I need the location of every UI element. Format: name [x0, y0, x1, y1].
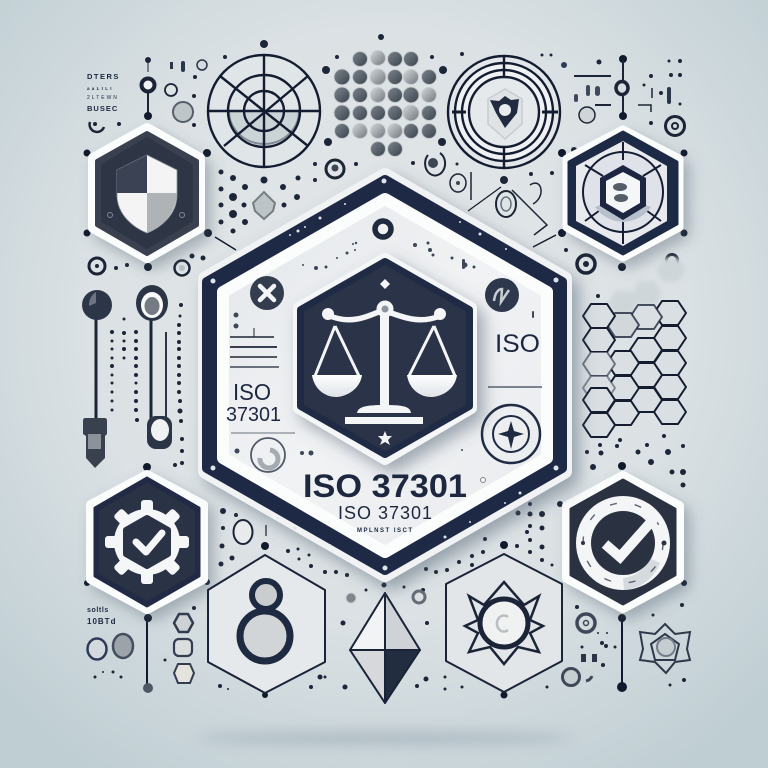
circle icon: glyph — [485, 278, 519, 312]
top-left micro text — [87, 72, 120, 113]
bottom-left small glyphs: soltls — [87, 607, 109, 614]
text: ISO 37301 title: ISO 37301 — [303, 468, 467, 504]
band highlights — [210, 178, 558, 570]
left gauge instruments — [82, 285, 172, 468]
text: ISO right: ISO — [495, 330, 540, 358]
hexagon badge: check — [567, 476, 679, 608]
hexagon badge: gear check — [91, 475, 203, 609]
bottom-left small glyphs — [87, 520, 425, 683]
hexagon outline: figure eight — [208, 555, 325, 693]
top-left micro text: BUSEC — [87, 104, 118, 113]
node and line connectors — [84, 149, 688, 698]
icon: small top-left nodes — [90, 57, 207, 132]
dot matrix — [334, 50, 436, 156]
icon: sunburst star — [465, 582, 543, 664]
ring top — [375, 221, 391, 237]
top-left micro text: DTERS — [87, 72, 120, 81]
icon: scales of justice — [312, 279, 457, 445]
icon: shield — [117, 155, 177, 233]
rule line — [231, 432, 295, 434]
hexagon badge: shield — [93, 128, 200, 258]
icon: diamond — [350, 593, 420, 703]
mid top small glyphs — [89, 153, 678, 276]
right honeycomb — [583, 258, 686, 437]
bottom-right small glyphs — [562, 614, 597, 686]
text: ISO 37301 subtitle: ISO 37301 — [338, 503, 432, 523]
circle icon: x — [250, 276, 284, 310]
speckles — [234, 242, 534, 456]
text: ISO left: ISO — [233, 379, 271, 405]
top-left micro text: 2LTEWN — [87, 95, 119, 101]
icon: figure eight — [240, 581, 290, 661]
hexagon badge: wheel — [567, 130, 679, 257]
icon: checkmark ring — [576, 496, 670, 590]
scattered dots field — [94, 34, 686, 690]
rule line right — [488, 386, 542, 388]
main hexagon badge — [206, 176, 564, 574]
ring icon left — [251, 438, 285, 472]
top-right small glyphs — [561, 55, 684, 136]
bottom-left small glyphs: 10BTd — [87, 617, 116, 626]
top-left micro text: aaLILI — [87, 86, 114, 91]
icon: concentric target with shield — [448, 55, 560, 168]
icon: spider web star — [640, 624, 690, 673]
left rule lines — [230, 328, 279, 367]
text: 37301 left: 37301 — [226, 404, 281, 426]
icon: radar circle — [208, 55, 320, 167]
text: small caption: MPLNST ISCT — [357, 528, 412, 534]
central hexagon with scales — [299, 259, 471, 459]
icon: gear — [105, 500, 189, 584]
compass icon — [482, 405, 540, 463]
hexagon outline: star — [446, 554, 562, 692]
